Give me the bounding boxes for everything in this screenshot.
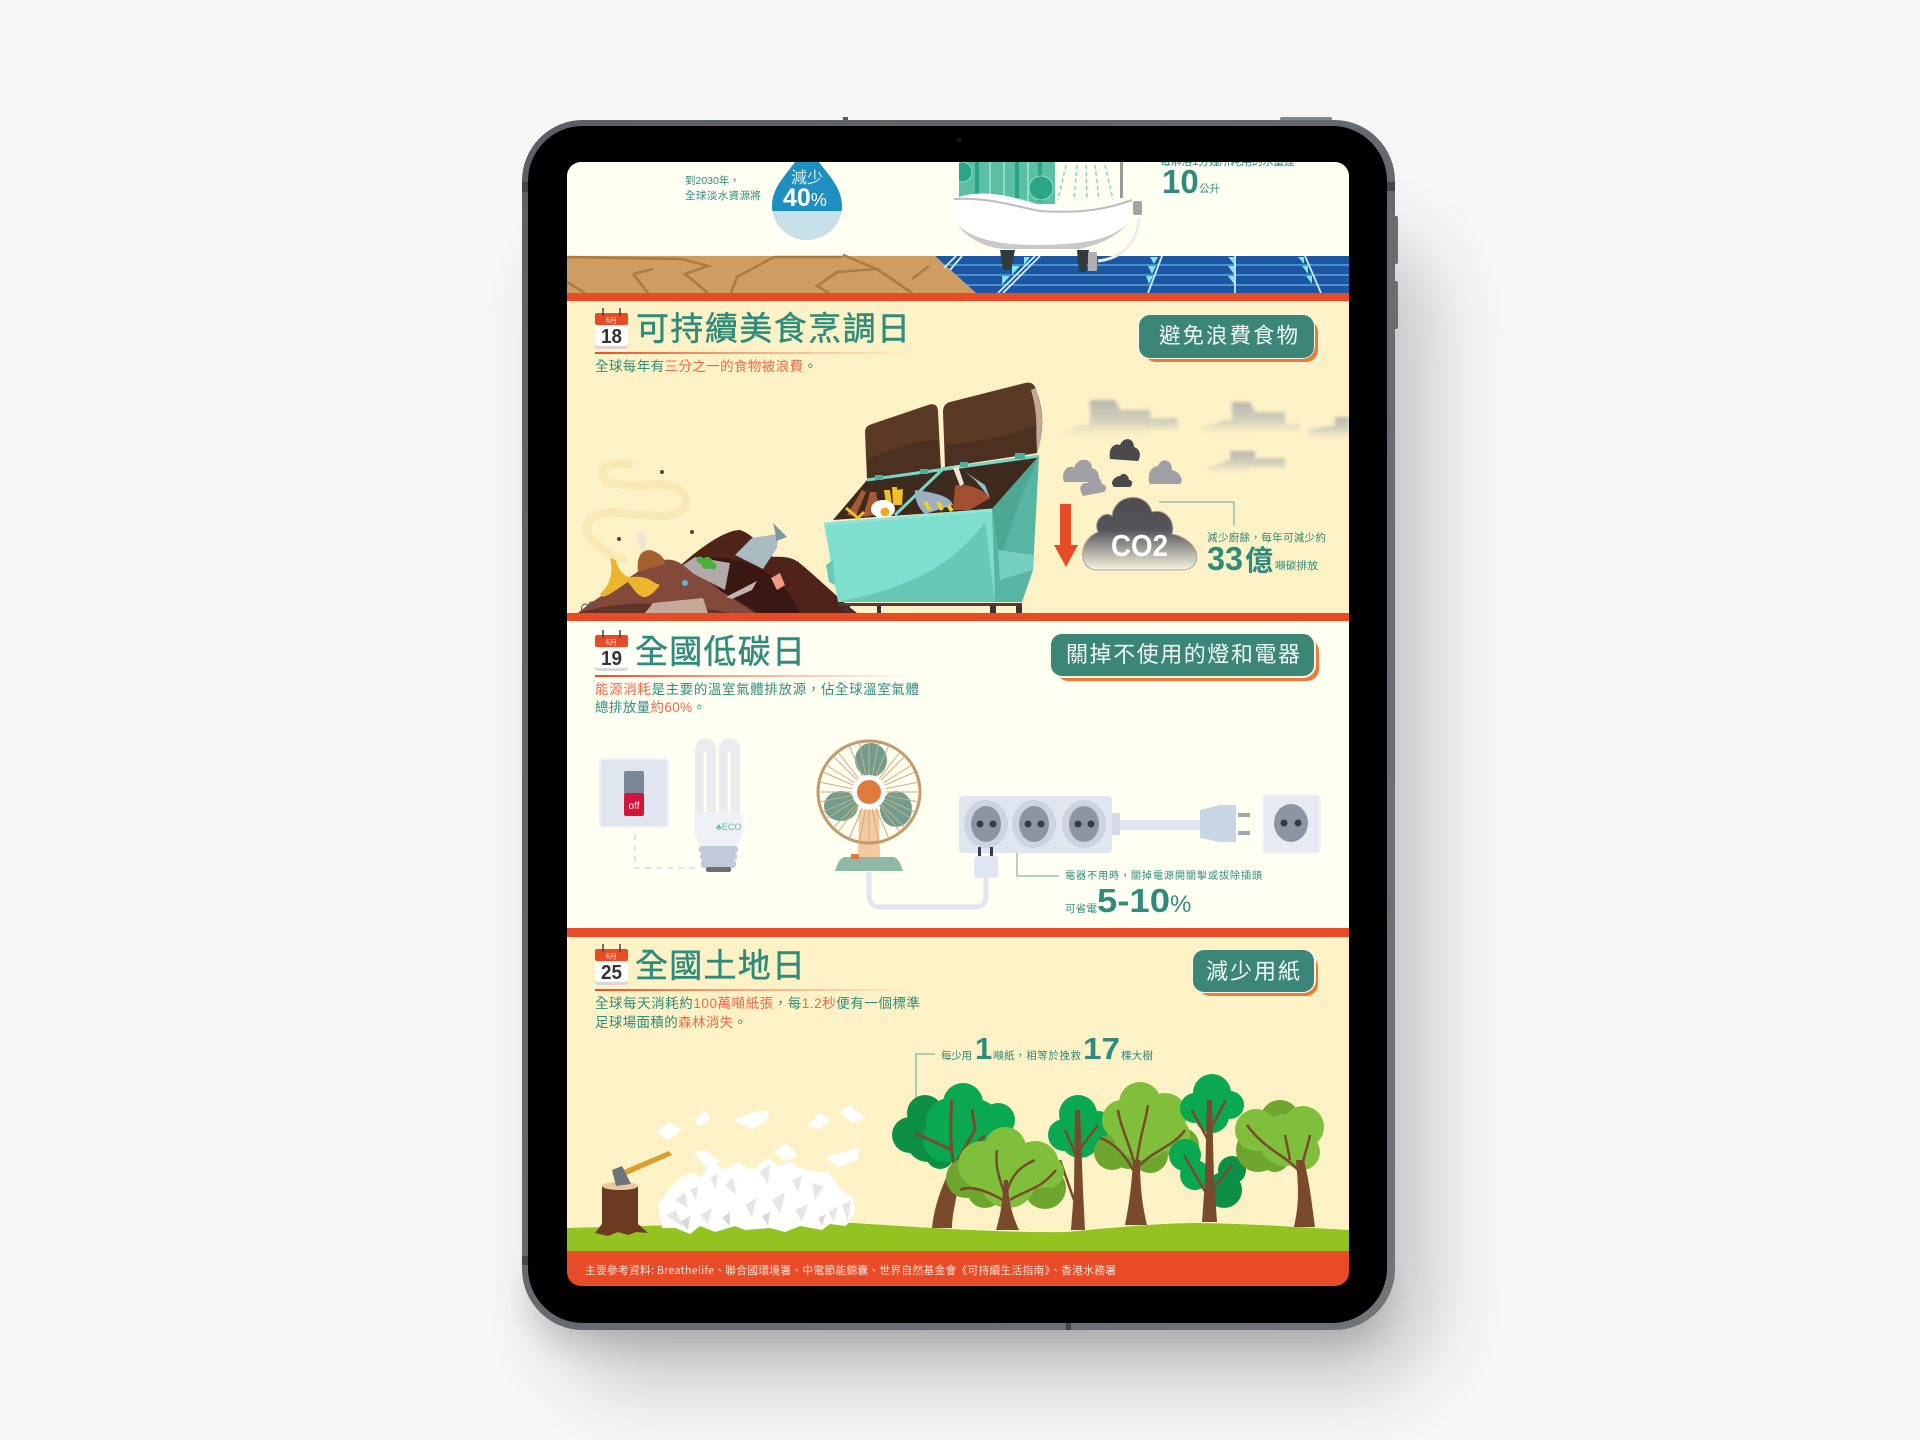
tree saving text: 1 — [975, 1031, 992, 1066]
paper fact: 足球場面積的森林消失。 — [595, 1015, 747, 1030]
water drop callout: 減少 — [791, 164, 823, 188]
garbage pile — [578, 523, 857, 613]
food waste fact: 全球每年有三分之一的食物被浪費。 — [595, 355, 817, 375]
flies — [617, 470, 694, 541]
tree saving text: 17 — [1083, 1031, 1120, 1066]
shower text: 10 — [1162, 163, 1199, 200]
eco bulb: ♣ECO — [716, 822, 741, 832]
desk fan — [818, 741, 920, 871]
paper fact — [595, 996, 920, 1030]
small carbon clouds — [1063, 439, 1182, 496]
co2 saving text — [1208, 532, 1326, 573]
tree 5 — [1169, 1074, 1246, 1222]
energy fact — [595, 681, 919, 715]
leader line — [1017, 853, 1059, 876]
paper fact: 全球每天消耗約100萬噸紙張，每1.2秒便有一個標準 — [595, 996, 920, 1011]
panel: low carbon day — [567, 621, 1349, 928]
saving text: 電器不用時，關掉電源開關掣或拔除插頭 — [1065, 867, 1262, 882]
tree saving text — [941, 1031, 1154, 1066]
panel: land day — [567, 937, 1349, 1251]
paper pile — [656, 1105, 866, 1234]
bathtub with shower — [952, 162, 1142, 272]
dumpster — [824, 383, 1042, 613]
light switch: off — [629, 801, 640, 812]
wall socket — [1263, 795, 1320, 853]
tree 2 — [946, 1127, 1066, 1230]
red divider — [567, 928, 1349, 937]
title underline — [595, 675, 915, 677]
action badge: reduce paper — [1191, 949, 1318, 996]
shower text: 公升 — [1199, 181, 1220, 196]
red divider — [567, 613, 1349, 621]
co2 cloud: CO2 — [1111, 528, 1168, 563]
water drop callout: 40% — [783, 184, 827, 212]
calendar icon 19: 6月 — [606, 638, 617, 648]
blue tile floor — [935, 256, 1349, 293]
dashed wire — [635, 834, 698, 868]
calendar icon 25: 25 — [601, 962, 622, 984]
fan cord — [869, 872, 986, 907]
tree saving text: 噸紙，相等於挽救 — [993, 1048, 1082, 1063]
calendar icon 18 — [595, 308, 628, 349]
dumpster food — [846, 466, 990, 518]
tablet device frame — [522, 117, 1398, 1330]
red divider — [567, 293, 1349, 301]
tree 6 — [1235, 1100, 1324, 1227]
calendar icon 25: 6月 — [606, 952, 617, 962]
leader line — [916, 1054, 935, 1098]
calendar icon 18: 6月 — [606, 316, 617, 326]
smell wisp — [586, 464, 687, 560]
panel: sustainable gastronomy day — [567, 301, 1349, 613]
eco bulb — [694, 738, 743, 872]
saving text: 可省電 — [1065, 901, 1098, 916]
tree stump and axe — [595, 1151, 672, 1236]
energy fact: 能源消耗是主要的溫室氣體排放源，佔全球溫室氣體 — [595, 681, 919, 697]
device shadow — [530, 240, 1430, 1380]
calendar icon 19: 19 — [601, 648, 622, 670]
calendar icon 19 — [595, 630, 628, 671]
title: 可持續美食烹調日 — [636, 302, 910, 350]
trees — [892, 1074, 1324, 1230]
saving text: % — [1170, 891, 1191, 918]
title: 全國低碳日 — [635, 625, 805, 673]
title underline — [595, 352, 915, 354]
co2 saving text: 33 — [1207, 540, 1243, 577]
power strip — [959, 796, 1250, 878]
green ground — [567, 1223, 1349, 1251]
flying paper sheets — [656, 1105, 866, 1167]
tree 4 — [1094, 1082, 1199, 1225]
cracked dry ground — [567, 255, 976, 293]
panel: water section — [567, 162, 1349, 293]
title underline — [595, 989, 915, 991]
co2 leader line — [1159, 502, 1234, 526]
action badge: reduce paper: 減少用紙 — [1206, 954, 1300, 986]
shower text: 每淋浴1分鐘所耗用的水量達 — [1160, 154, 1295, 168]
light switch — [600, 759, 668, 827]
footer sources bar: 主要參考資料: Breathelife、聯合國環境署、中電節能錦囊、世界自然基金會《可持續生活指南》、香港水務署 — [585, 1262, 1116, 1278]
footer sources bar — [567, 1251, 1349, 1286]
action badge: avoid food waste — [1137, 314, 1318, 362]
shower text — [1160, 162, 1295, 194]
calendar icon 25 — [595, 944, 628, 985]
tree saving text: 棵大樹 — [1121, 1048, 1154, 1063]
action badge: turn off lights — [1049, 633, 1319, 681]
tree 3 — [1048, 1095, 1117, 1230]
tree 1 — [892, 1083, 1016, 1228]
action badge: turn off lights: 關掉不使用的燈和電器 — [1066, 637, 1300, 669]
co2 saving text: 億 — [1245, 539, 1273, 579]
saving text — [1065, 867, 1262, 919]
down arrow — [1054, 504, 1078, 567]
calendar icon 18: 18 — [601, 326, 622, 348]
freshwater text: 全球淡水資源將 — [685, 189, 762, 202]
tablet screen infographic — [567, 140, 1349, 1286]
co2 cloud — [1083, 497, 1197, 570]
freshwater text — [686, 175, 761, 200]
freshwater text: 到2030年， — [685, 174, 740, 187]
energy fact: 總排放量約60%。 — [595, 700, 706, 715]
tree saving text: 每少用 — [941, 1048, 972, 1063]
water drop callout — [772, 162, 842, 240]
action badge: avoid food waste: 避免浪費食物 — [1159, 319, 1298, 350]
co2 saving text: 減少廚餘，每年可減少約 — [1207, 530, 1326, 545]
co2 saving text: 噸碳排放 — [1275, 558, 1318, 573]
saving text: 5-10 — [1097, 882, 1170, 919]
title: 全國土地日 — [635, 939, 805, 987]
smog clouds — [1050, 400, 1349, 475]
